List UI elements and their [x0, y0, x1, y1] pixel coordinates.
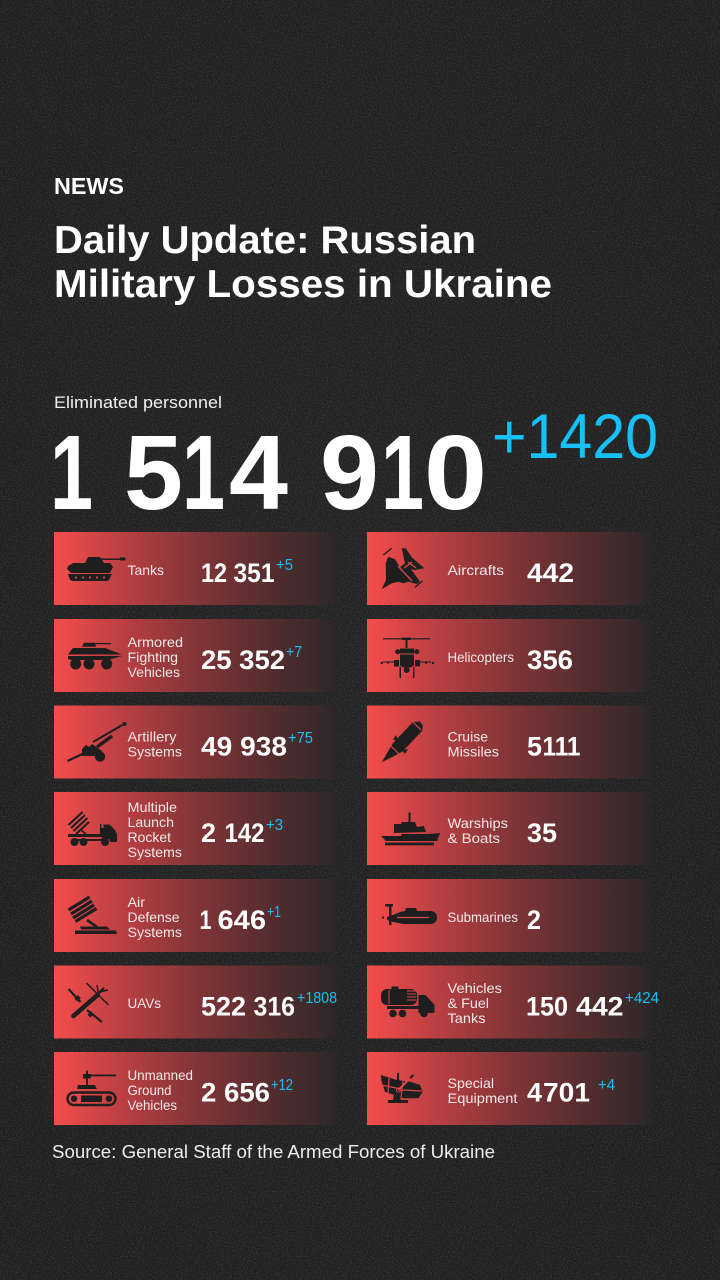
panel: tanks — [54, 532, 338, 605]
panel: unmanned ground vehicles: Unmanned — [128, 1067, 193, 1083]
panel: vehicles and fuel tanks: Vehicles — [448, 980, 502, 996]
panel: special equipment — [367, 1052, 652, 1125]
panel: warships and boats: 35 — [527, 818, 557, 848]
panel: tanks: 351 — [234, 558, 274, 588]
icon: rocket launcher truck — [68, 812, 117, 846]
icon: drones — [68, 983, 108, 1022]
panel: armored fighting vehicles: +7 — [286, 644, 302, 661]
panel: special equipment: +4 — [598, 1077, 615, 1094]
panel: special equipment: 4 — [527, 1078, 542, 1108]
eyebrow: NEWS: NEWS — [54, 173, 124, 199]
personnel total: 0 — [424, 414, 487, 532]
icon: fuel truck — [381, 986, 434, 1017]
panel: UAVs: UAVs — [128, 995, 161, 1011]
personnel total: 9 — [320, 414, 379, 532]
panel: artillery systems: +75 — [288, 730, 313, 747]
icon: helicopter — [380, 638, 434, 678]
icon: cruise missile — [382, 722, 423, 762]
panel: multiple launch rocket systems: 2 — [201, 818, 216, 848]
panel: multiple launch rocket systems: Rocket — [128, 829, 171, 845]
panel: tanks: Tanks — [128, 562, 164, 578]
panel: air defense systems: Systems — [128, 924, 182, 940]
personnel daily change: +1420 — [492, 402, 658, 472]
panel: vehicles and fuel tanks: & Fuel — [448, 995, 489, 1011]
icon: tank — [67, 557, 126, 581]
panel: multiple launch rocket systems: Launch — [128, 814, 174, 830]
panel: aircrafts: 442 — [527, 558, 574, 588]
panel: air defense systems: Defense — [128, 909, 180, 925]
panel: warships and boats: Warships — [448, 815, 508, 831]
panel: helicopters — [367, 619, 652, 692]
panel: air defense systems: 646 — [218, 905, 266, 935]
panel: special equipment: Equipment — [448, 1090, 518, 1106]
title — [54, 219, 552, 306]
personnel total: 5 — [124, 414, 183, 532]
panel: vehicles and fuel tanks: Tanks — [448, 1010, 486, 1026]
icon: artillery — [68, 722, 126, 762]
panel: submarines: Submarines — [448, 909, 518, 925]
panel: submarines: 2 — [527, 905, 541, 935]
panel: air defense systems — [54, 879, 338, 952]
personnel total: 1 — [182, 414, 225, 532]
panel: multiple launch rocket systems — [54, 792, 338, 865]
panel: tanks: 12 — [201, 558, 227, 588]
icon: radar dish — [381, 1073, 423, 1103]
panel: armored fighting vehicles: Fighting — [128, 649, 178, 665]
panel: artillery systems: Systems — [128, 744, 182, 760]
panel: special equipment: Special — [448, 1075, 494, 1091]
panel: unmanned ground vehicles: +12 — [271, 1077, 293, 1094]
personnel total: 1 — [50, 414, 93, 532]
panel: warships and boats: & Boats — [448, 830, 500, 846]
source line: Source: General Staff of the Armed Forces of Ukraine — [52, 1142, 495, 1162]
icon: armored vehicle — [68, 643, 122, 670]
panel: unmanned ground vehicles: Vehicles — [128, 1097, 177, 1113]
panel: tanks: +5 — [276, 557, 293, 574]
icon: air defense launcher — [68, 897, 117, 934]
panel: air defense systems: +1 — [267, 904, 281, 921]
panel: UAVs: 522 — [201, 992, 246, 1022]
panel: unmanned ground vehicles: 2 656 — [201, 1078, 270, 1108]
panel: submarines — [367, 879, 652, 952]
panel: cruise missiles: 111 — [542, 732, 580, 762]
panel: vehicles and fuel tanks: 150 — [526, 992, 568, 1022]
panel: armored fighting vehicles: Armored — [128, 634, 183, 650]
panel: cruise missiles — [367, 706, 652, 778]
panel: multiple launch rocket systems: +3 — [266, 817, 283, 834]
panel: armored fighting vehicles: Vehicles — [128, 664, 180, 680]
panel: aircrafts — [367, 532, 652, 605]
panel: vehicles and fuel tanks: 442 — [576, 992, 624, 1022]
panel: air defense systems: 1 — [200, 905, 212, 935]
panel: helicopters: 356 — [527, 645, 573, 675]
panel: vehicles and fuel tanks: +424 — [625, 990, 659, 1007]
personnel label: Eliminated personnel — [54, 393, 222, 412]
panel: cruise missiles: Missiles — [448, 744, 499, 760]
panel: armored fighting vehicles — [54, 619, 338, 692]
panel: special equipment: 701 — [543, 1078, 590, 1108]
icon: warship — [381, 812, 440, 845]
panel: multiple launch rocket systems: 142 — [224, 818, 264, 848]
personnel total: 1 — [381, 414, 424, 532]
panel: UAVs — [54, 966, 338, 1038]
panel: multiple launch rocket systems: Multiple — [128, 799, 177, 815]
icon: fighter jet — [382, 548, 424, 589]
title: Military Losses in Ukraine — [54, 263, 552, 306]
icon: unmanned ground vehicle — [68, 1070, 116, 1105]
panel: UAVs: 316 — [254, 992, 295, 1022]
personnel total — [50, 414, 487, 532]
icon: submarine — [382, 904, 437, 925]
panel: helicopters: Helicopters — [448, 649, 514, 665]
panel: aircrafts: Aircrafts — [448, 562, 504, 578]
panel: cruise missiles: 5 — [527, 732, 542, 762]
panel: artillery systems: 49 938 — [201, 732, 287, 762]
panel: artillery systems — [54, 706, 338, 778]
title: Daily Update: Russian — [54, 219, 476, 262]
panel: artillery systems: Artillery — [128, 728, 176, 744]
panel: unmanned ground vehicles: Ground — [128, 1082, 172, 1098]
panel: warships and boats — [367, 792, 652, 865]
panel: armored fighting vehicles: 25 352 — [201, 645, 285, 675]
panel: air defense systems: Air — [128, 894, 145, 910]
panel: cruise missiles: Cruise — [448, 728, 488, 744]
panel: vehicles and fuel tanks — [367, 966, 659, 1038]
panel: multiple launch rocket systems: Systems — [128, 844, 182, 860]
personnel total: 4 — [229, 414, 288, 532]
panel: unmanned ground vehicles — [54, 1052, 338, 1125]
panel: UAVs: +1808 — [297, 990, 337, 1007]
